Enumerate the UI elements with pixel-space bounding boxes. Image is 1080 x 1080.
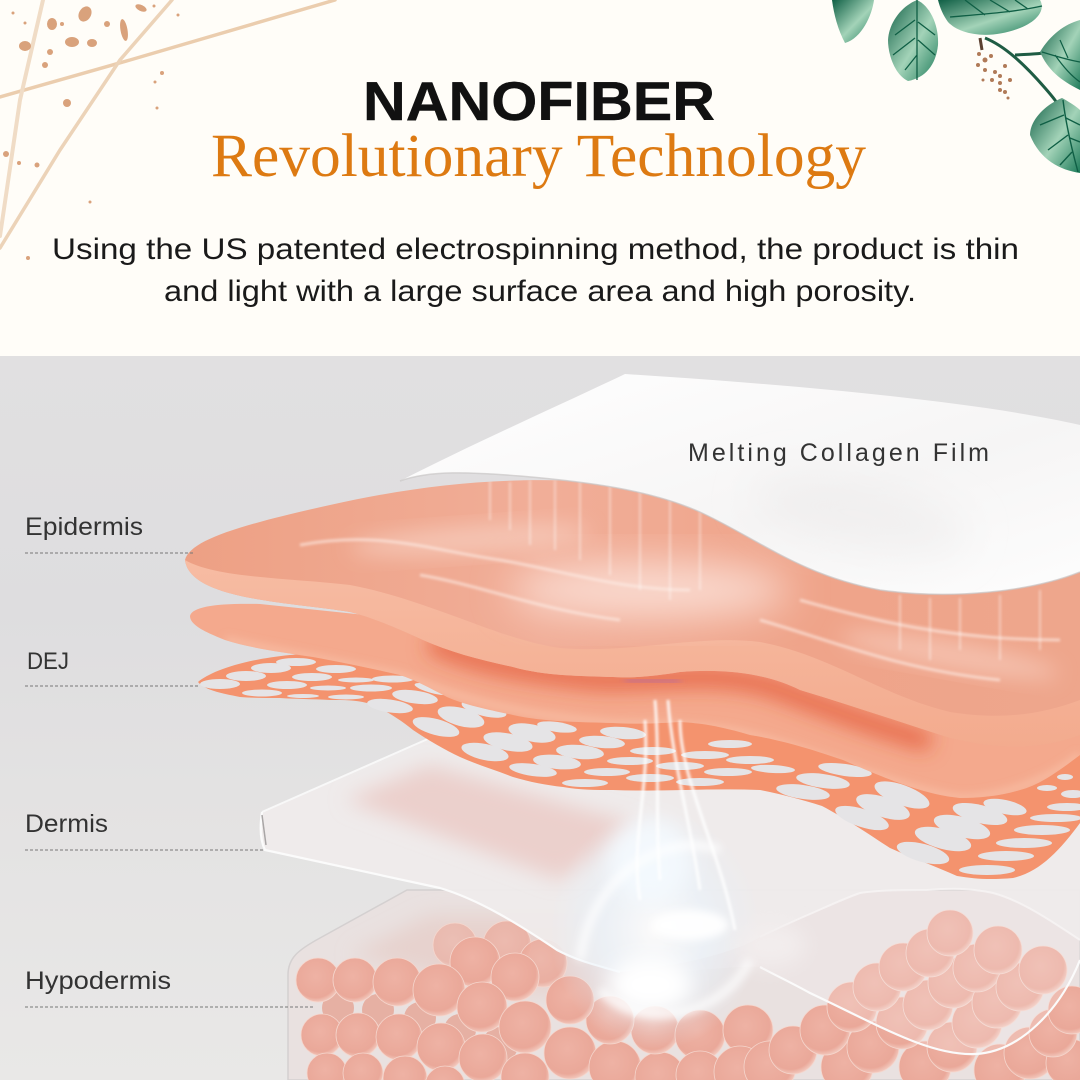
sheet lower transparent pocket <box>261 738 1080 1054</box>
block outline <box>288 890 1080 1080</box>
light streaks <box>637 700 735 930</box>
mesh holes <box>200 658 1080 875</box>
layer label: Hypodermis: Hypodermis <box>25 967 171 995</box>
epidermis layer <box>185 480 1080 747</box>
melting collagen film <box>400 374 1080 594</box>
epidermis surface highlights <box>300 480 1061 688</box>
panel background <box>0 356 1080 1080</box>
description text: and light with a large surface area and high porosity. <box>164 275 916 308</box>
layer label: DEJ: DEJ <box>27 648 69 675</box>
dermis clear sheet <box>261 738 1080 1054</box>
red crease shading <box>225 640 1080 798</box>
dermal-epidermal junction layer <box>190 604 1080 798</box>
header background <box>0 0 1080 356</box>
energy glow <box>550 700 805 1050</box>
title line: Revolutionary Technology: Revolutionary Technology <box>211 123 866 190</box>
reticular mesh layer <box>198 654 1080 879</box>
sheet upper opaque band <box>261 738 1080 972</box>
title line: NANOFIBER: NANOFIBER <box>363 70 715 132</box>
layer label: Dermis: Dermis <box>25 810 108 838</box>
title <box>211 70 866 190</box>
epidermis front rim <box>185 560 1080 747</box>
description text: Using the US patented electrospinning method, the product is thin <box>52 233 1019 266</box>
panel: skin layers illustration <box>0 356 1080 1080</box>
stem <box>985 38 1062 112</box>
hypodermis sphere block <box>288 890 1080 1080</box>
description text <box>52 233 1019 308</box>
layer label: Epidermis: Epidermis <box>25 513 143 541</box>
hazy back spheres <box>350 915 700 1000</box>
film label: Melting Collagen Film <box>688 439 989 467</box>
front spheres <box>296 910 1080 1080</box>
decorative gold sticks and speckles <box>0 0 335 260</box>
decorative watercolor leaves <box>832 0 1080 173</box>
